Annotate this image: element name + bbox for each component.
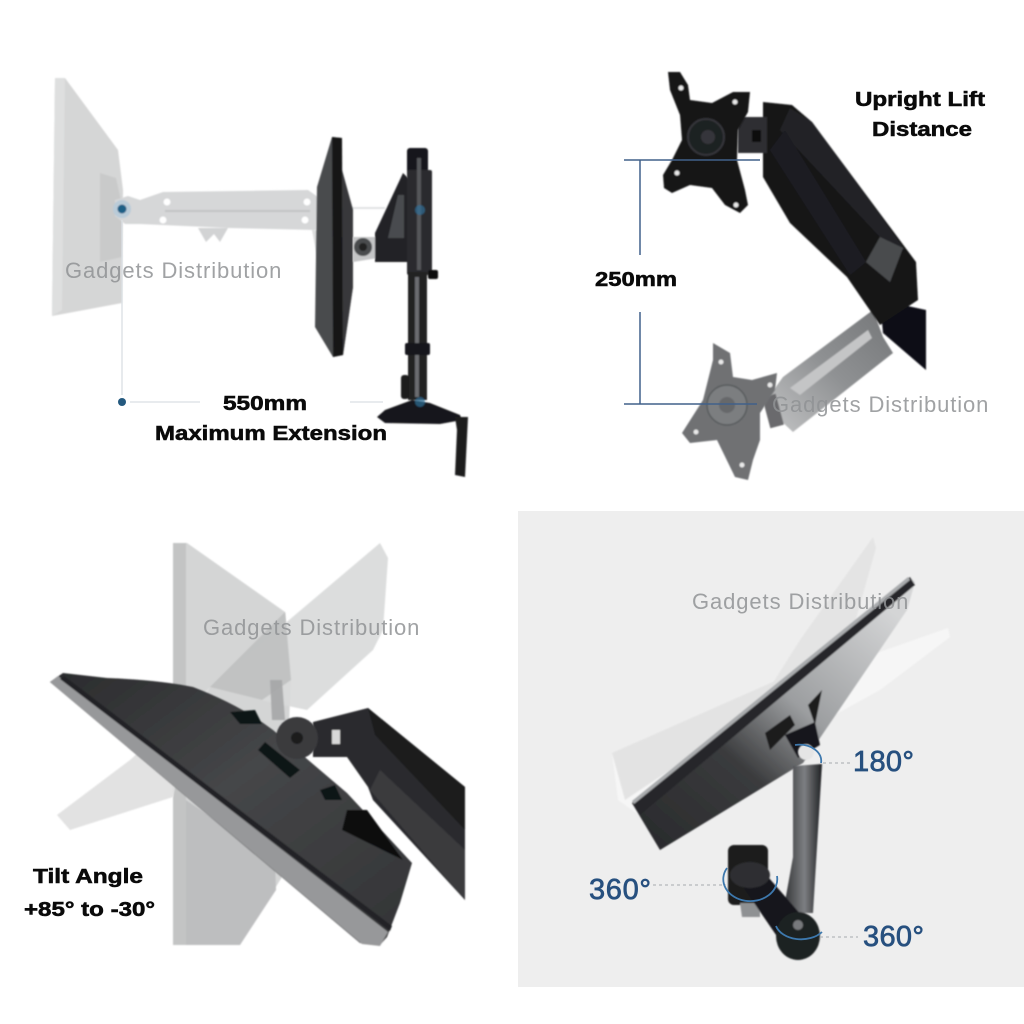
- label: 360 degrees right: 360°: [863, 921, 924, 953]
- label: distance: Distance: [872, 119, 972, 141]
- icon: dark monitor: [315, 137, 353, 357]
- icon: ghost monitor extended: [52, 78, 123, 316]
- watermark: Gadgets Distribution: [203, 615, 420, 640]
- icon: black monitor tilted: [50, 673, 412, 946]
- marker dot: [118, 398, 126, 406]
- rotation arrows: [723, 745, 822, 939]
- icon: ghost lower arm: [762, 310, 893, 432]
- leader lines: [653, 763, 858, 937]
- icon: upper plate: [663, 72, 750, 213]
- dimension lines: [624, 160, 760, 404]
- icon: black monitor: [632, 577, 915, 850]
- icon: monitor arm: [353, 173, 410, 262]
- watermark: Gadgets Distribution: [692, 589, 909, 614]
- icon: ghost lower plate: [682, 343, 777, 480]
- label: 550mm: 550mm: [223, 393, 307, 415]
- label: maximum extension: Maximum Extension: [155, 423, 387, 445]
- watermark: Gadgets Distribution: [772, 392, 989, 417]
- icon: ghost monitor upright: [173, 543, 291, 945]
- watermark: Gadgets Distribution: [65, 258, 282, 283]
- panel: rotation: [518, 511, 1024, 987]
- panel: upright lift distance: [595, 72, 989, 480]
- label: tilt range: +85° to -30°: [24, 899, 155, 921]
- panel background: [518, 511, 1024, 987]
- panel: maximum extension: [52, 78, 468, 477]
- guide lines: [122, 220, 383, 402]
- label: 360 degrees left: 360°: [589, 874, 651, 906]
- icon: arm: [728, 744, 822, 960]
- panel: tilt angle: [24, 543, 465, 946]
- label: upright lift: Upright Lift: [855, 89, 985, 111]
- icon: pole and clamp: [377, 148, 468, 477]
- icon: ghost monitors: [612, 537, 950, 837]
- icon: ghost monitor tilted back: [57, 543, 388, 830]
- label: 180 degrees: 180°: [853, 746, 914, 778]
- label: tilt angle: Tilt Angle: [33, 866, 143, 888]
- label: 250mm: 250mm: [595, 269, 677, 291]
- icon: arm: [313, 708, 465, 900]
- icon: upper arm: [738, 102, 926, 370]
- icon: ghost arm extended: [113, 190, 385, 262]
